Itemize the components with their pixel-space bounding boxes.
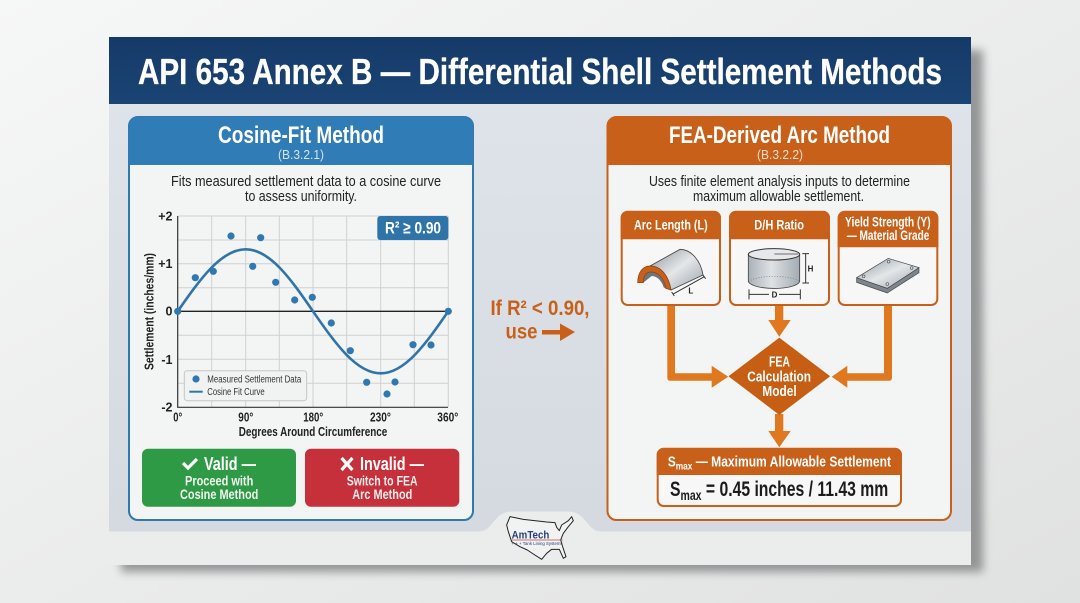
result: maximum allowable settlement: max <box>681 487 702 503</box>
description: FEA: Uses finite element analysis inputs to determine <box>649 173 910 190</box>
icon: arc segment: L <box>688 286 693 295</box>
icon: steel plate <box>857 258 919 293</box>
invalid result button: Invalid — <box>360 454 424 474</box>
x axis ticks: 0° <box>173 411 182 425</box>
panel header: cosine-fit <box>129 117 473 165</box>
result: maximum allowable settlement: S <box>668 455 677 471</box>
result: maximum allowable settlement: max <box>676 462 693 473</box>
chart legend <box>184 371 307 401</box>
decision: FEA calculation model: FEA <box>769 355 790 371</box>
icon: cylinder <box>748 249 814 300</box>
input: arc length <box>621 212 721 305</box>
slide card <box>109 37 971 565</box>
footer strip <box>109 512 971 565</box>
panel: cosine-fit method <box>129 117 473 520</box>
description: cosine-fit: Fits measured settlement data to a cosine curve <box>171 173 441 190</box>
arrows into model <box>667 305 892 447</box>
title banner <box>109 37 971 104</box>
description: FEA: maximum allowable settlement. <box>693 188 864 205</box>
valid result button: Proceed with <box>185 474 253 489</box>
y axis ticks: +2 <box>158 210 173 224</box>
panel header: FEA: (B.3.2.2) <box>757 147 803 162</box>
y axis label: Settlement (inches/mm) <box>142 253 156 370</box>
icon: cross <box>342 458 352 470</box>
x axis ticks: 90° <box>238 411 253 425</box>
invalid result button: Switch to FEA <box>347 474 418 489</box>
logo: AmTech <box>507 517 573 559</box>
cosine fit curve <box>178 249 448 373</box>
x axis ticks: 230° <box>370 411 391 425</box>
icon: cylinder: H <box>808 265 814 274</box>
invalid result button: Arc Method <box>352 487 412 502</box>
input: yield strength: — Material Grade <box>847 227 929 243</box>
valid result button <box>142 449 296 507</box>
invalid result button <box>305 449 459 507</box>
x axis label: Degrees Around Circumference <box>239 424 387 439</box>
chart legend: Measured Settlement Data <box>207 374 302 386</box>
icon: cylinder: D <box>772 291 778 300</box>
panel: FEA-derived arc method <box>608 117 951 520</box>
panel header: FEA: FEA-Derived Arc Method <box>669 122 890 149</box>
panel header: FEA <box>608 117 951 165</box>
x axis ticks: 180° <box>303 411 323 425</box>
y axis ticks: +1 <box>158 257 173 271</box>
decision: FEA calculation model: Calculation <box>747 370 811 386</box>
input: yield strength: Yield Strength (Y) <box>845 213 931 229</box>
result: maximum allowable settlement <box>657 449 902 506</box>
chart: settlement vs degrees <box>142 210 458 439</box>
valid result button: Cosine Method <box>180 487 258 502</box>
result: maximum allowable settlement: S <box>670 478 684 501</box>
input: D/H ratio: D/H Ratio <box>754 216 804 232</box>
description: cosine-fit <box>171 173 441 205</box>
decision: FEA calculation model <box>729 338 829 414</box>
valid result button: Valid — <box>204 454 256 474</box>
input: yield strength <box>838 212 938 305</box>
y axis ticks: -1 <box>161 353 173 367</box>
decision: FEA calculation model: Model <box>762 384 797 400</box>
result: maximum allowable settlement: — Maximum Allowable Settlement <box>692 455 891 471</box>
logo: AmTech: AmTech <box>512 529 550 541</box>
arrow: to FEA <box>542 324 575 341</box>
icon: check <box>183 459 197 468</box>
x axis ticks: 360° <box>437 411 458 425</box>
r-squared badge: R² ≥ 0.90 <box>385 218 441 238</box>
y axis ticks: 0 <box>166 304 173 318</box>
transition callout <box>490 297 590 344</box>
measured data points <box>174 232 452 398</box>
description: FEA <box>649 173 910 205</box>
input: arc length: Arc Length (L) <box>634 216 708 232</box>
transition callout: If R² < 0.90, <box>490 297 590 320</box>
y axis ticks <box>158 210 173 414</box>
input: D/H ratio <box>729 212 830 305</box>
result: maximum allowable settlement: = 0.45 inches / 11.43 mm <box>702 478 888 501</box>
y axis ticks: -2 <box>161 400 173 414</box>
panel header: cosine-fit: Cosine-Fit Method <box>218 122 384 149</box>
r-squared badge <box>377 216 448 240</box>
chart legend: Cosine Fit Curve <box>207 387 265 398</box>
transition callout: use <box>506 320 538 344</box>
logo: AmTech: + + + Tank Lining Systems <box>512 541 563 546</box>
x axis ticks <box>173 411 458 425</box>
description: cosine-fit: to assess uniformity. <box>245 188 357 205</box>
panel header: cosine-fit: (B.3.2.1) <box>278 147 324 162</box>
